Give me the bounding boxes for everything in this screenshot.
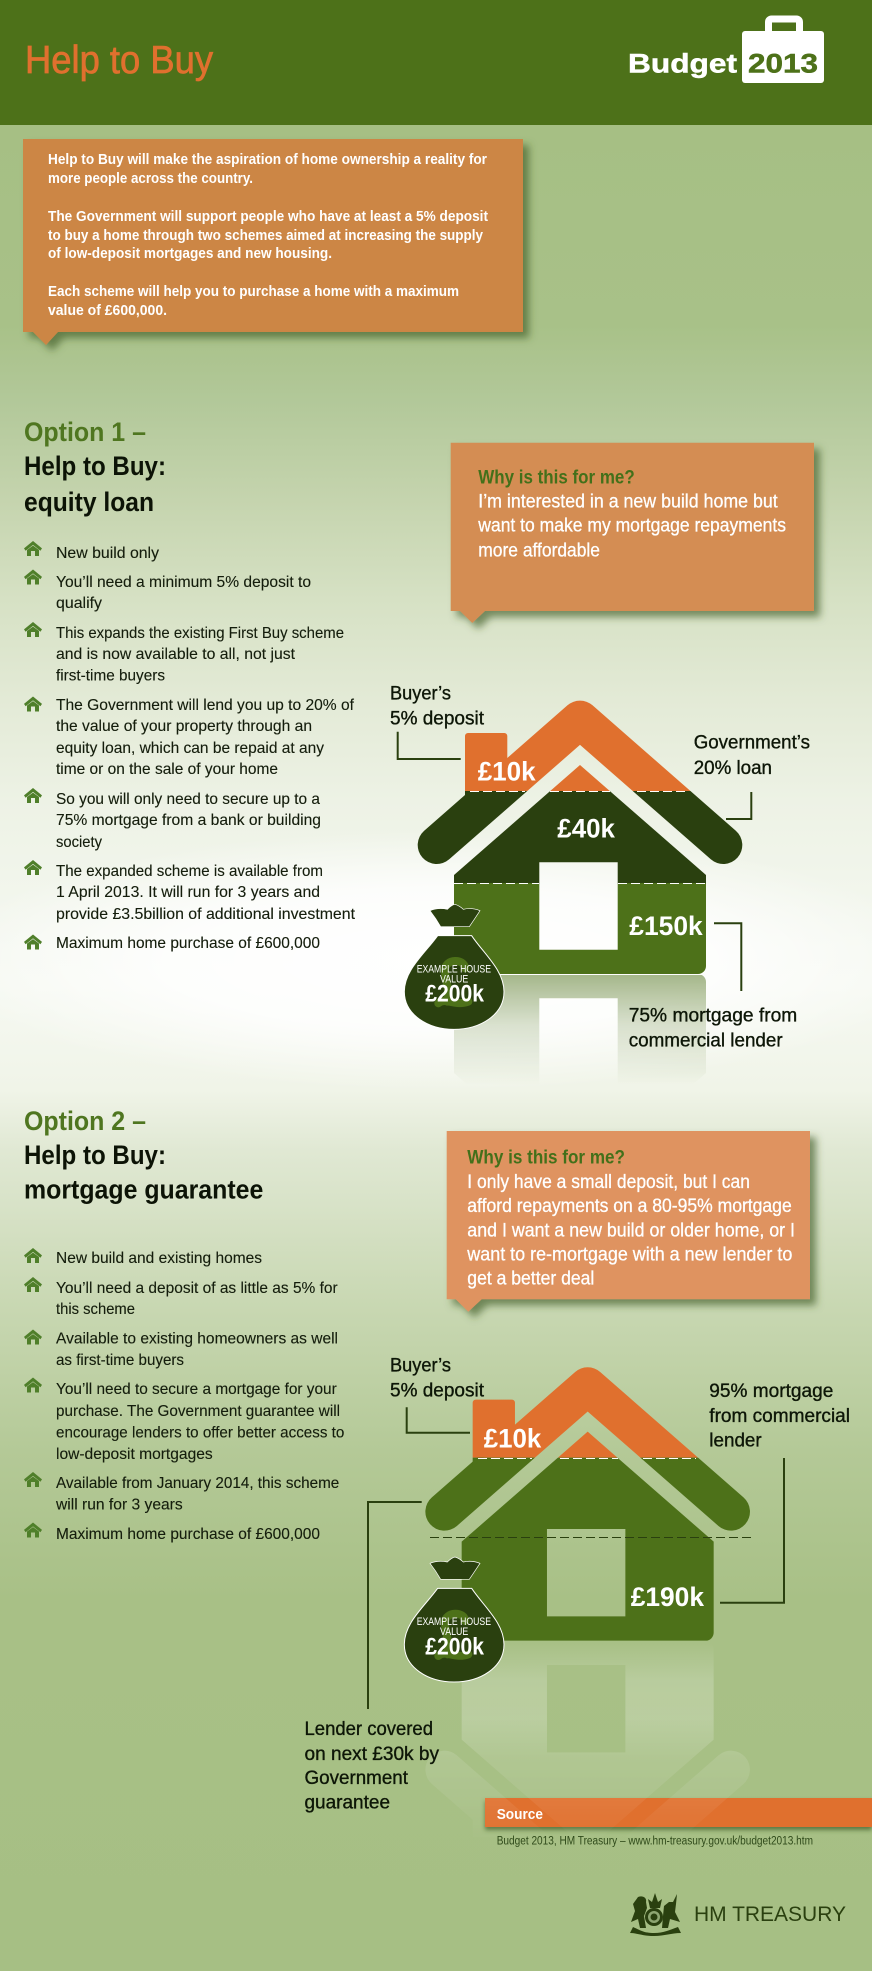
callout: why is this for me, option 2: get a better deal [467,1268,594,1290]
label: 75% mortgage: 75% mortgage from [629,1005,797,1027]
callout: why is this for me, option 2: and I want a new build or older home, or I [467,1220,795,1242]
bullet list: option 1: This expands the existing First Buy scheme [56,625,344,642]
callout: why is this for me, option 2: afford repayments on a 80-95% mortgage [467,1195,792,1217]
label: buyer's deposit, option 2: 5% deposit [390,1380,485,1402]
bullet list: option 2: New build and existing homes [56,1250,262,1267]
logo: Budget 2013 briefcase [628,19,824,83]
intro callout: Help to Buy will make the aspiration of home ownership a reality for [48,152,487,168]
callout: why is this for me, option 1: want to make my mortgage repayments [477,515,786,537]
bullet list: option 1: You’ll need a minimum 5% deposit to [56,574,311,591]
bullet list: option 2: You’ll need a deposit of as little as 5% for [56,1280,338,1297]
label: buyer's deposit, option 2 [390,1355,485,1433]
label: buyer's deposit, option 2: Buyer’s [390,1355,451,1377]
money bag: option 2 [404,1557,504,1682]
source bar [485,1798,872,1827]
roof segment: buyer's deposit [472,1367,698,1458]
bullet list: option 2 [24,1248,344,1543]
intro callout: value of £600,000. [48,303,167,319]
label: 95% mortgage [709,1380,850,1603]
label: buyer's deposit, option 1 [390,683,485,759]
heading: option 1: Option 1 – [24,417,146,447]
callout: why is this for me, option 2: want to re-mortgage with a new lender to [466,1244,792,1266]
money bag: option 1 [404,904,504,1029]
background glow [0,800,872,1120]
money bag: option 2: VALUE [440,1626,468,1638]
heading: option 2: Option 2 – [24,1106,146,1136]
bullet list: option 1: equity loan, which can be repaid at any [56,740,324,757]
money bag: option 2: £200k [425,1633,485,1660]
bullet list: option 1: The Government will lend you up to 20% of [56,697,355,714]
bullet list: option 1: So you will only need to secure up to a [56,791,320,808]
money bag: option 1: VALUE [440,973,468,985]
logo: Budget 2013 briefcase: 2013 [748,48,818,78]
bullet list: option 1: The expanded scheme is available from [56,863,323,880]
label: government guarantee: Lender covered [304,1718,433,1740]
bullet list: option 2: You’ll need to secure a mortgage for your [56,1381,337,1398]
logo: Budget 2013 briefcase: Budget [628,48,737,78]
intro callout: Each scheme will help you to purchase a home with a maximum [48,284,459,300]
bullet list: option 1 [24,541,356,952]
heading: option 2: mortgage guarantee [24,1175,263,1205]
title: Help to Buy [25,39,213,82]
bullet list: option 2: low-deposit mortgages [56,1446,213,1463]
heading: option 2: Help to Buy: [24,1140,166,1170]
bullet list: option 1: Maximum home purchase of £600,000 [56,935,320,952]
reflection of house 1 [454,975,706,1074]
bullet list: option 1: and is now available to all, not just [56,646,296,663]
reflection of house 2 [426,1656,750,1820]
bullet list: option 2: this scheme [56,1301,135,1318]
label: government guarantee: Government [304,1767,409,1789]
label: 95% mortgage: 95% mortgage [709,1380,833,1402]
value: £150k: £150k [629,911,704,941]
bullet list: option 2: as first-time buyers [56,1352,184,1369]
bullet list: option 1: society [56,834,102,851]
bullet list: option 1: qualify [56,595,102,612]
bullet list: option 2: will run for 3 years [55,1496,183,1513]
money bag: option 2: EXAMPLE HOUSE [417,1616,491,1628]
callout: why is this for me, option 1: Why is this for me? [478,467,635,488]
label: government guarantee [304,1502,439,1814]
heading: option 1 [24,417,166,517]
label: 75% mortgage [629,923,797,1052]
intro callout: to buy a home through two schemes aimed at increasing the supply [48,228,483,244]
bullet list: option 2: Available to existing homeowners as well [56,1330,338,1347]
label: buyer's deposit, option 1: Buyer’s [390,683,451,705]
source text: Budget 2013, HM Treasury – www.hm-treasury.gov.uk/budget2013.htm [497,1836,813,1848]
roof segment: buyer's deposit [465,700,690,791]
HM Treasury logo [630,1893,846,1936]
callout: why is this for me, option 2: Why is this for me? [467,1148,625,1169]
callout: why is this for me, option 2: I only have a small deposit, but I can [467,1171,750,1193]
icon: royal crest [630,1893,681,1936]
label: 75% mortgage: commercial lender [629,1030,783,1052]
bullet list: option 1: the value of your property through an [56,718,312,735]
value: £10k: £10k [484,1423,542,1453]
heading: option 1: equity loan [24,487,154,517]
label: government guarantee: guarantee [304,1792,390,1814]
source bar: Source [497,1806,543,1823]
heading: option 1: Help to Buy: [24,451,166,481]
label: government's loan [694,732,810,819]
intro callout: more people across the country. [48,171,253,187]
value: £190k: £190k [631,1582,705,1612]
bullet list: option 2: Maximum home purchase of £600,000 [56,1526,320,1543]
bullet list: option 1: 1 April 2013. It will run for 3 years and [56,884,320,901]
callout: why is this for me, option 1: more affordable [478,540,600,562]
middle segment: government loan [418,791,742,883]
bullet list: option 2: encourage lenders to offer better access to [56,1425,344,1442]
heading: option 2 [24,1106,263,1205]
house diagram: option 2 [430,1386,755,1641]
intro callout: of low-deposit mortgages and new housing. [48,246,332,262]
callout: why is this for me, option 2 [447,1131,810,1312]
bullet list: option 1: time or on the sale of your home [56,761,278,778]
callout: why is this for me, option 1: I’m interested in a new build home but [478,491,778,513]
lower segment: mortgage [425,1458,750,1641]
label: 95% mortgage: from commercial [709,1405,850,1427]
intro callout: The Government will support people who have at least a 5% deposit [48,209,488,225]
callout: why is this for me, option 1 [451,443,814,623]
label: buyer's deposit, option 1: 5% deposit [390,707,485,729]
lower segment: mortgage [454,883,706,974]
label: 95% mortgage: lender [709,1430,762,1452]
house diagram: option 1 [437,720,723,974]
bullet list: option 2: purchase. The Government guarantee will [56,1403,340,1420]
label: government's loan: 20% loan [694,757,772,779]
bullet list: option 1: first-time buyers [56,668,165,684]
label: government guarantee: on next £30k by [304,1743,439,1765]
bullet list: option 1: New build only [56,545,159,562]
bullet list: option 1: 75% mortgage from a bank or building [56,812,321,829]
label: government's loan: Government’s [694,732,810,754]
value: £40k: £40k [557,813,616,843]
money bag: option 1: EXAMPLE HOUSE [417,963,491,975]
intro callout [23,139,523,345]
bullet list: option 2: Available from January 2014, this scheme [56,1475,339,1492]
money bag: option 1: £200k [425,981,485,1008]
bullet list: option 1: provide £3.5billion of additional investment [56,906,356,923]
value: £10k: £10k [478,757,537,787]
wordmark: HM TREASURY [694,1903,846,1926]
header band [0,0,872,125]
